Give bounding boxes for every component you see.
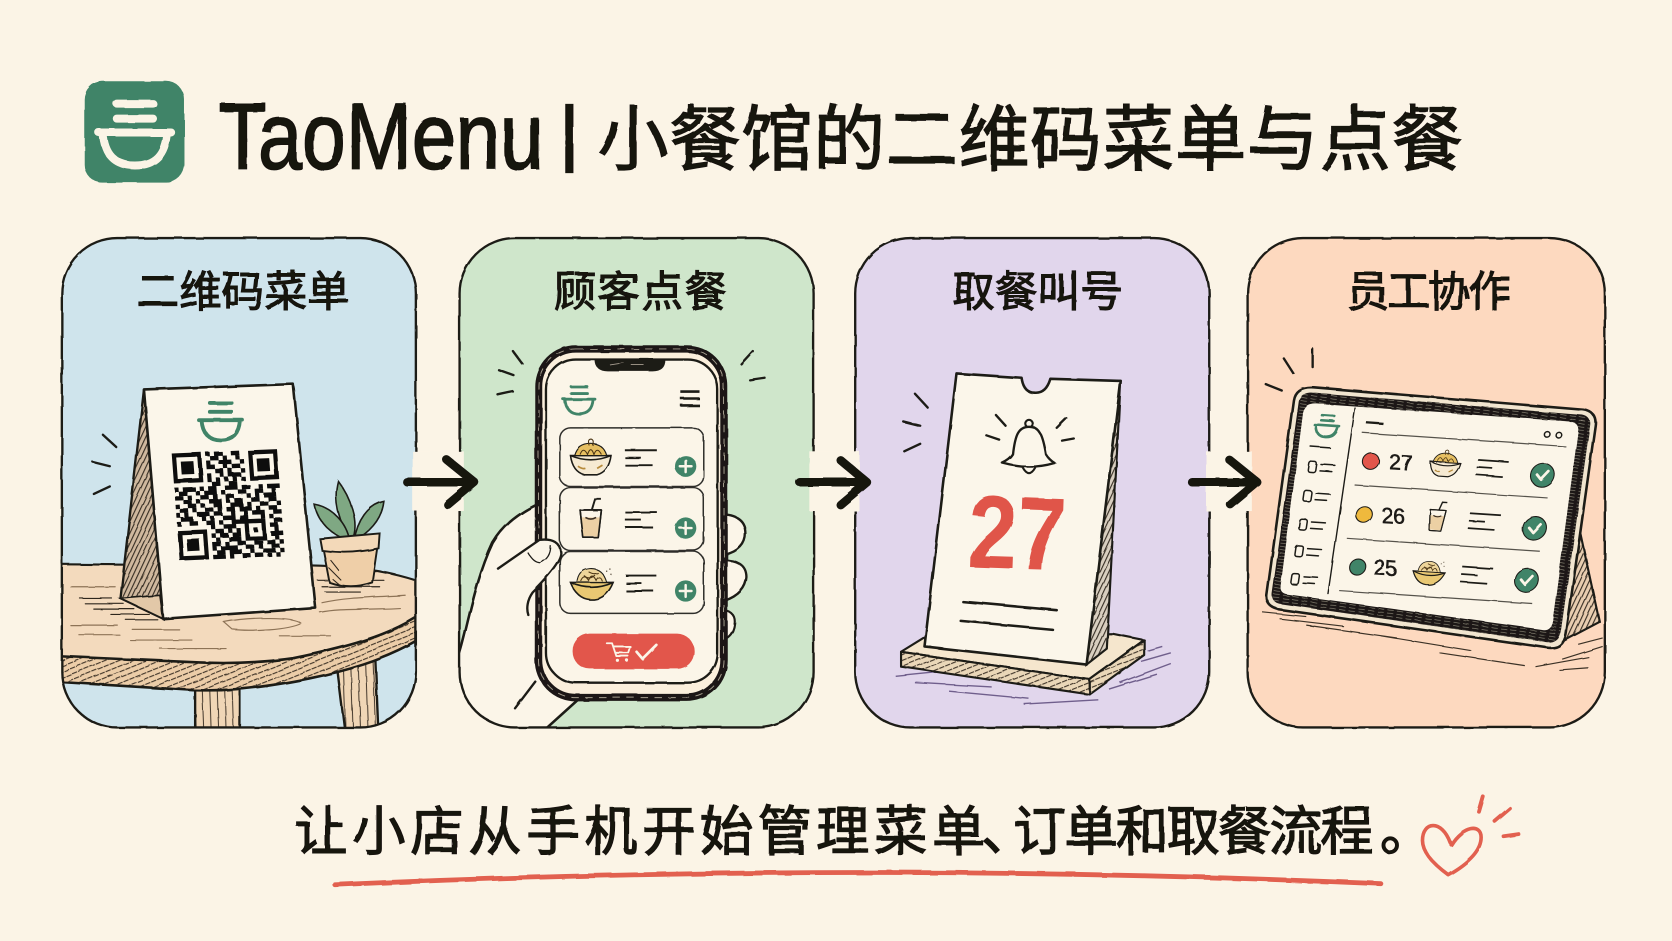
tablet — [1267, 387, 1596, 648]
attention marks — [93, 434, 116, 494]
panel outline — [855, 238, 1209, 727]
arrow: step 1 to 2 — [407, 451, 475, 511]
text lines — [961, 602, 1057, 629]
panel outline — [62, 238, 416, 727]
screen content — [1290, 405, 1569, 608]
panel heading: 顾客点餐 — [553, 268, 727, 316]
arrow: step 3 to 4 — [1192, 451, 1257, 511]
thumb outline — [498, 540, 561, 708]
table top — [53, 564, 422, 690]
panel heading: 员工协作 — [1347, 268, 1511, 316]
panel outline — [460, 238, 814, 727]
attention marks — [903, 394, 928, 451]
number ticket — [925, 373, 1121, 665]
panel: 顾客点餐 — [453, 238, 814, 730]
illustration: table with QR card — [53, 564, 422, 736]
attention marks — [1266, 349, 1313, 391]
order rows: 26 — [1381, 503, 1405, 529]
panel: 员工协作 — [1248, 238, 1605, 727]
panel outline — [1248, 238, 1605, 727]
tablet outer shell — [1267, 387, 1596, 648]
icon: TaoMenu logo — [84, 81, 184, 183]
table legs — [193, 661, 380, 727]
QR code — [172, 451, 285, 558]
icon: heart with sparks — [1422, 797, 1518, 875]
bezel scribble — [1272, 393, 1590, 642]
tablet stand — [1559, 528, 1599, 643]
artwork — [53, 81, 1605, 885]
panel: 取餐叫号 — [855, 238, 1209, 727]
tagline: 。 — [1380, 803, 1433, 862]
tagline — [294, 803, 1433, 862]
header bar — [1366, 422, 1383, 423]
smartphone — [538, 349, 724, 698]
title: 小餐馆的二维码菜单与点餐 — [597, 100, 1463, 180]
menu cards — [560, 428, 704, 613]
tablet screen — [1281, 404, 1578, 630]
order rows: 25 — [1374, 556, 1397, 581]
icon: bell — [986, 415, 1074, 473]
tagline: 、 — [981, 803, 1034, 862]
hand holding phone — [453, 501, 746, 730]
title: TaoMenu — [219, 84, 544, 189]
thumb nail — [528, 545, 550, 562]
order rows: 27 — [1389, 450, 1413, 476]
surface shadow — [1263, 612, 1603, 670]
desk shadow — [896, 646, 1171, 704]
tablet bezel — [1272, 393, 1590, 642]
panel: 二维码菜单 — [53, 238, 422, 736]
title: | — [560, 93, 579, 173]
checkout button — [573, 634, 694, 669]
red underline — [335, 872, 1381, 885]
arrow: step 2 to 3 — [800, 451, 867, 511]
table tent card — [120, 384, 316, 619]
order rows — [1346, 445, 1557, 593]
title — [219, 84, 1463, 189]
thumb — [475, 540, 561, 704]
sidebar items — [1291, 447, 1337, 586]
attention marks — [498, 351, 765, 395]
tagline: 订单和取餐流程 — [1013, 803, 1373, 862]
panel heading: 二维码菜单 — [136, 268, 350, 316]
tagline: 让小店从手机开始管理菜单 — [294, 803, 985, 862]
tablet stand hatch — [1559, 528, 1599, 643]
icon: potted plant — [315, 481, 384, 586]
panel heading: 取餐叫号 — [952, 268, 1123, 316]
wooden base — [901, 634, 1144, 694]
queue number: 27 — [966, 473, 1068, 592]
